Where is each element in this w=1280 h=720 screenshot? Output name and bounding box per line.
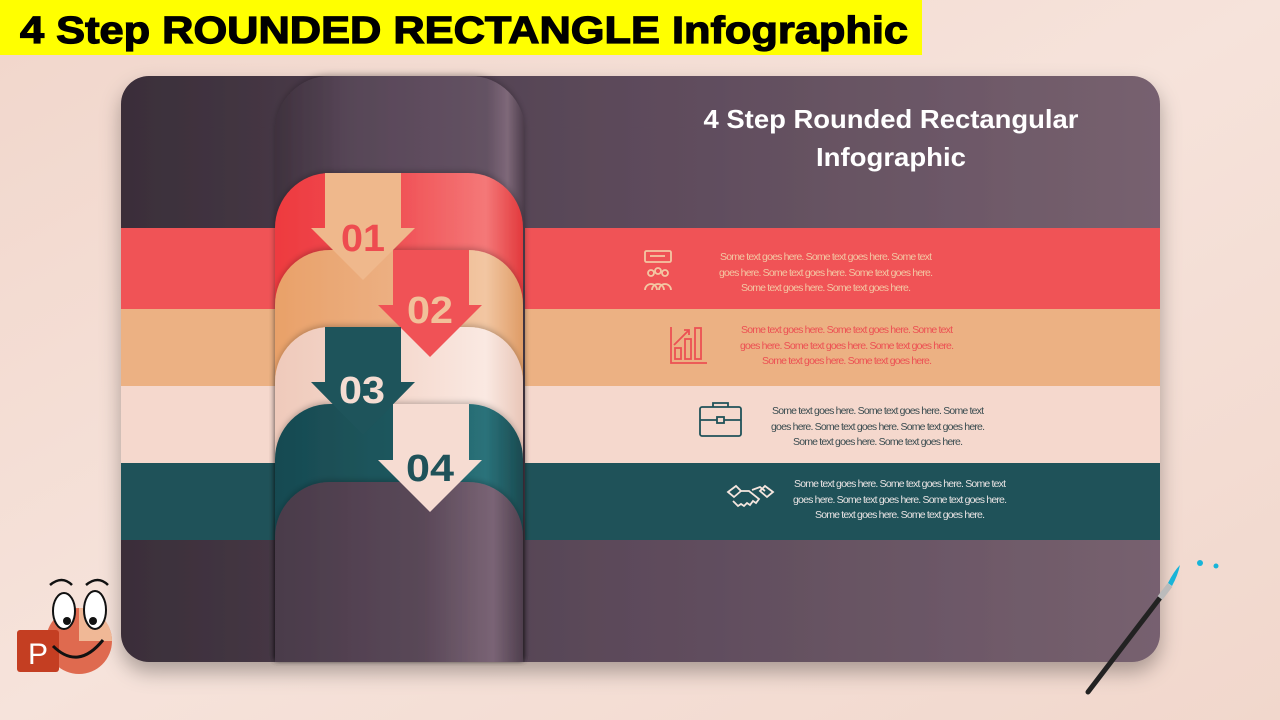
main panel (121, 76, 1160, 662)
text block 3: Some text goes here. Some text goes here. (793, 436, 963, 448)
icon: briefcase (700, 403, 741, 436)
arrow 04: 04 (406, 448, 454, 490)
text block 4: Some text goes here. Some text goes here. Some text (794, 478, 1006, 490)
arrow 03 (311, 327, 415, 435)
text block 1 (719, 251, 933, 294)
text block 2 (740, 324, 954, 367)
text block 2: Some text goes here. Some text goes here. (762, 355, 932, 367)
icon: chart (671, 327, 707, 363)
text block 2: Some text goes here. Some text goes here. Some text (741, 324, 953, 336)
logo: powerpoint face (17, 580, 112, 674)
arrow 03: 03 (339, 370, 385, 412)
text block 1: Some text goes here. Some text goes here. (741, 282, 911, 294)
column of stacked rounded tabs (275, 76, 525, 662)
arrow 02: 02 (407, 290, 453, 332)
icon: meeting (645, 251, 671, 290)
text block 1: goes here. Some text goes here. Some text goes here. (719, 267, 933, 279)
heading: 4 Step Rounded Rectangular (704, 104, 1078, 134)
text block 4 (793, 478, 1007, 521)
arrow 02 (378, 250, 482, 357)
text block 2: goes here. Some text goes here. Some text goes here. (740, 340, 954, 352)
text block 3 (771, 405, 985, 448)
title banner (0, 0, 922, 55)
logo: powerpoint face: P (28, 638, 48, 671)
text block 4: Some text goes here. Some text goes here. (815, 509, 985, 521)
text block 3: Some text goes here. Some text goes here. Some text (772, 405, 984, 417)
heading (704, 104, 1078, 172)
arrow 01 (311, 173, 415, 280)
icon: handshake (728, 486, 773, 506)
text block 4: goes here. Some text goes here. Some text goes here. (793, 494, 1007, 506)
text block 1: Some text goes here. Some text goes here. Some text (720, 251, 932, 263)
text block 3: goes here. Some text goes here. Some text goes here. (771, 421, 985, 433)
heading: Infographic (816, 142, 966, 172)
arrow 04 (378, 404, 482, 512)
title banner: 4 Step ROUNDED RECTANGLE Infographic (20, 10, 908, 52)
icon: paint brush (1088, 560, 1218, 692)
arrow 01: 01 (341, 218, 385, 260)
